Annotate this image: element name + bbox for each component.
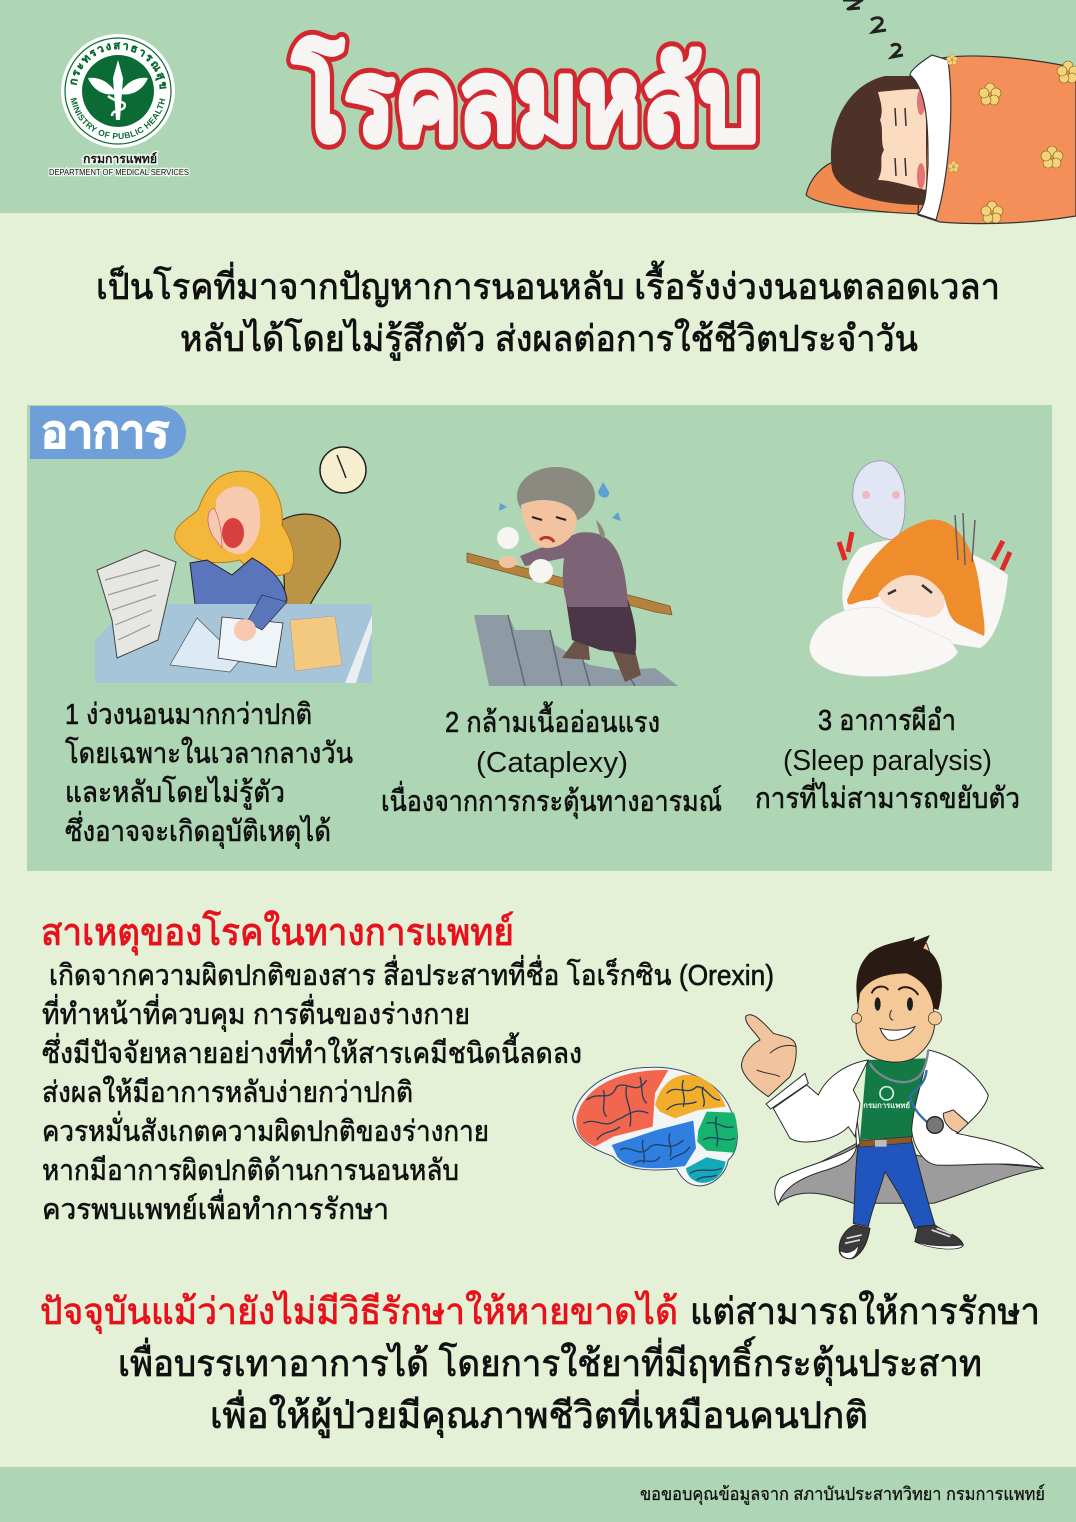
logo: Department of Medical Services: DEPARTMENT OF MEDICAL SERVICES bbox=[49, 168, 189, 177]
footer credit: ขอขอบคุณข้อมูลจาก สภาบันประสาทวิทยา กรมการแพทย์ bbox=[640, 1484, 1045, 1505]
causes body text: ควรพบแพทย์เพื่อทำการรักษา bbox=[42, 1189, 389, 1226]
illustration: doctor mascot in cape: กรมการแพทย์ bbox=[863, 1101, 910, 1110]
intro text: เป็นโรคที่มาจากปัญหาการนอนหลับ เรื้อรังง่วงนอนตลอดเวลา bbox=[96, 260, 1000, 307]
illustration: elderly woman on stairs with weak muscles bbox=[467, 467, 678, 686]
symptom 2 text: เนื่องจากการกระตุ้นทางอารมณ์ bbox=[381, 781, 722, 819]
footer band bbox=[0, 1467, 1076, 1522]
symptom 3 text: (Sleep paralysis) bbox=[783, 745, 992, 777]
causes body text: ควรหมั่นสังเกตความผิดปกติของร่างกาย bbox=[42, 1111, 489, 1148]
illustration: girl with sleep paralysis and ghost bbox=[810, 461, 1010, 676]
illustration: sleeping person under a blanket bbox=[806, 0, 1076, 224]
title: โรคลมหลับ bbox=[292, 37, 759, 164]
title: โรคลมหลับ bbox=[292, 37, 759, 164]
causes body text: ที่ทำหน้าที่ควบคุม การตื่นของร่างกาย bbox=[42, 994, 470, 1032]
causes body text: เกิดจากความผิดปกติของสาร สื่อประสาทที่ชื่อ โอเร็กซิน (Orexin) bbox=[49, 955, 774, 992]
causes body text: หากมีอาการผิดปกติด้านการนอนหลับ bbox=[42, 1155, 459, 1187]
illustration: coloured brain bbox=[573, 1067, 737, 1186]
closing text: แต่สามารถให้การรักษา bbox=[690, 1290, 1040, 1332]
symptom 1 text: โดยเฉพาะในเวลากลางวัน bbox=[65, 736, 353, 770]
closing text: เพื่อบรรเทาอาการได้ โดยการใช้ยาที่มีฤทธิ์กระตุ้นประสาท bbox=[118, 1336, 982, 1386]
heading: medical causes: สาเหตุของโรคในทางการแพทย์ bbox=[41, 910, 514, 955]
heading badge: symptoms: อาการ bbox=[41, 408, 169, 457]
logo: Department of Medical Services bbox=[48, 34, 190, 178]
symptom 3 text bbox=[755, 705, 1020, 815]
causes body text: ซึ่งมีปัจจัยหลายอย่างที่ทำให้สารเคมีชนิดนี้ลดลง bbox=[42, 1032, 582, 1070]
illustration: doctor mascot in cape bbox=[742, 935, 1043, 1259]
logo: Department of Medical Services: กระทรวงสาธารณสุข bbox=[70, 42, 167, 90]
logo: Department of Medical Services: กรมการแพทย์ bbox=[83, 152, 157, 166]
intro text: หลับได้โดยไม่รู้สึกตัว ส่งผลต่อการใช้ชีวิตประจำวัน bbox=[180, 318, 918, 361]
causes body text: ส่งผลให้มีอาการหลับง่ายกว่าปกติ bbox=[42, 1075, 413, 1109]
panel: symptoms bbox=[27, 405, 1052, 871]
symptom 2 text: 2 กล้ามเนื้ออ่อนแรง bbox=[445, 701, 660, 739]
causes body text bbox=[42, 955, 774, 1226]
symptom 1 text: 1 ง่วงนอนมากกว่าปกติ bbox=[65, 699, 312, 731]
closing text: ปัจจุบันแม้ว่ายังไม่มีวิธีรักษาให้หายขาดได้ bbox=[40, 1290, 678, 1334]
symptom 2 text: (Cataplexy) bbox=[476, 747, 628, 779]
intro text bbox=[96, 260, 1000, 361]
symptom 3 text: 3 อาการผีอำ bbox=[818, 705, 956, 737]
symptom 1 text: ซึ่งอาจจะเกิดอุบัติเหตุได้ bbox=[65, 811, 331, 849]
logo: Department of Medical Services: MINISTRY OF PUBLIC HEALTH bbox=[70, 98, 166, 139]
illustration: woman yawning at desk bbox=[95, 447, 372, 683]
symptom 1 text bbox=[65, 699, 353, 849]
symptom 3 text: การที่ไม่สามารถขยับตัว bbox=[755, 778, 1020, 815]
header band bbox=[0, 0, 1076, 213]
symptom 1 text: และหลับโดยไม่รู้ตัว bbox=[65, 775, 285, 810]
symptom 2 text bbox=[381, 701, 722, 819]
closing text: เพื่อให้ผู้ป่วยมีคุณภาพชีวิตที่เหมือนคนปกติ bbox=[210, 1389, 868, 1438]
closing text bbox=[40, 1290, 1040, 1438]
